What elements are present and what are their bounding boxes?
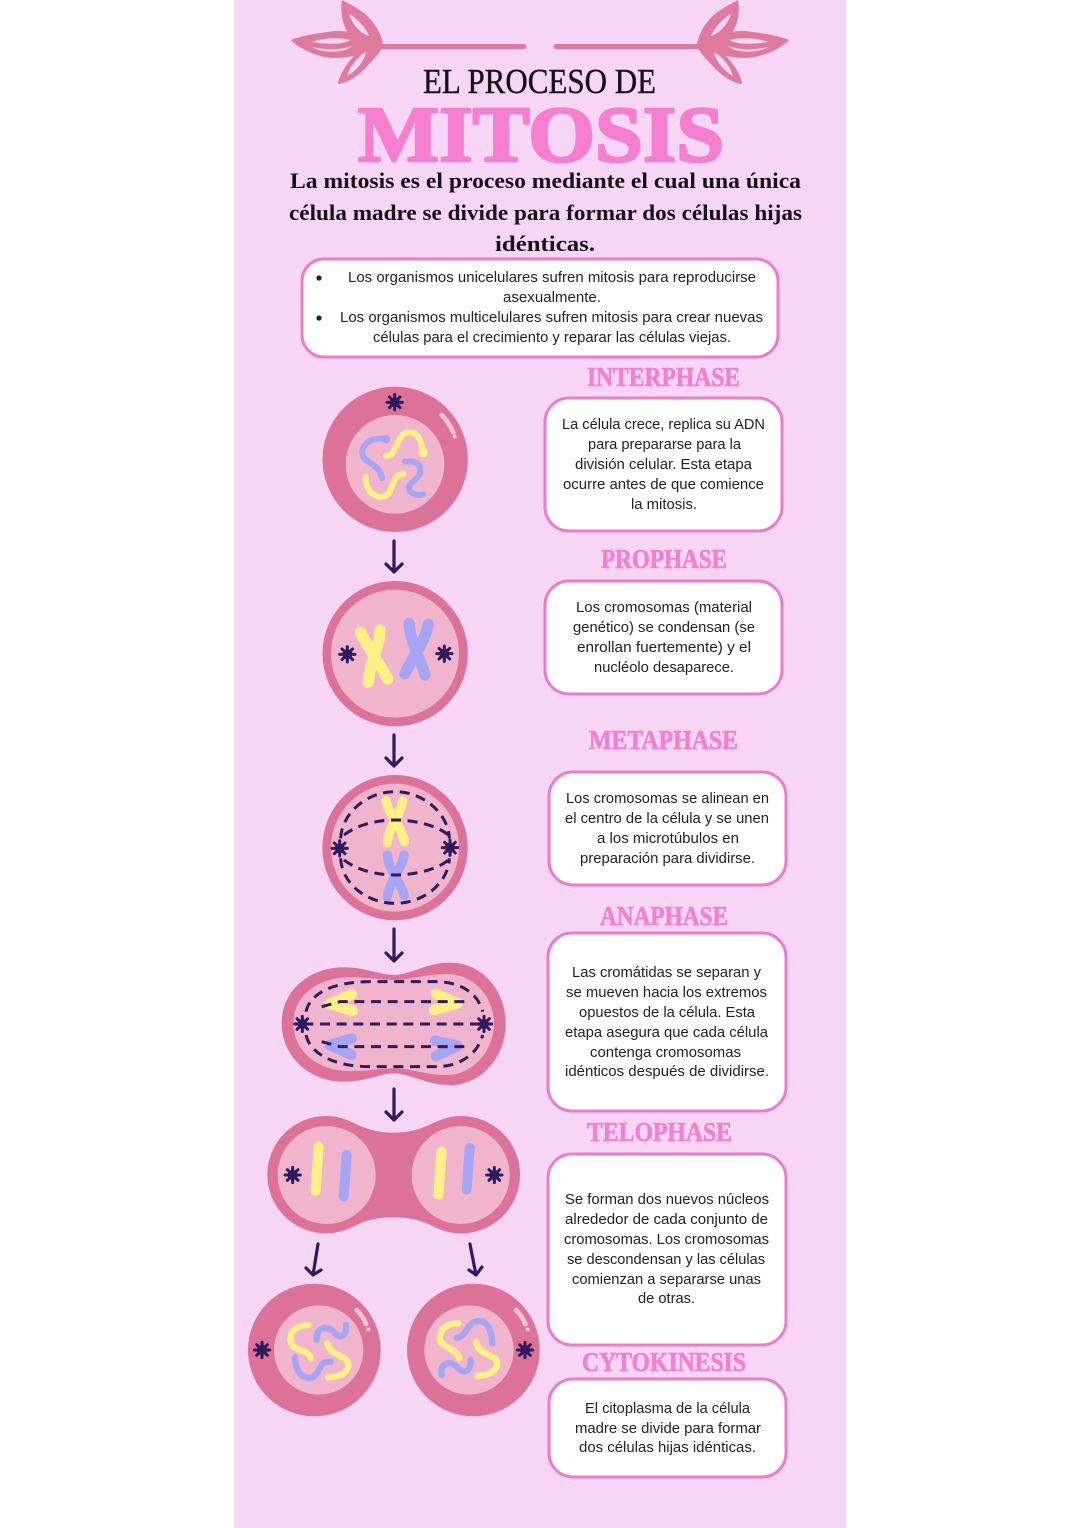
panel: organisms info box: Los organismos unicelulares sufren mitosis para reproducirse — [348, 270, 756, 286]
cell: metaphase — [322, 775, 468, 920]
panel: cytokinesis text — [549, 1379, 786, 1477]
panel: anaphase text: idénticos después de dividirse. — [565, 1064, 769, 1080]
panel: telophase text: alrededor de cada conjunto de — [565, 1212, 768, 1228]
intro paragraph: idénticas. — [495, 231, 595, 256]
heading: cytokinesis: CYTOKINESIS — [582, 1347, 746, 1377]
panel: prophase text: Los cromosomas (material — [576, 600, 752, 616]
arrow: metaphase to anaphase — [386, 929, 402, 961]
panel: cytokinesis text: El citoplasma de la célula — [585, 1401, 751, 1417]
arrow: telophase to right daughter cell — [469, 1244, 482, 1275]
panel: telophase text: de otras. — [638, 1291, 695, 1307]
panel: anaphase text: opuestos de la célula. Esta — [579, 1005, 756, 1021]
title: el proceso de: EL PROCESO DE — [423, 62, 656, 101]
panel: organisms info box — [302, 259, 778, 357]
cell: telophase — [267, 1116, 520, 1233]
panel: interphase text: para prepararse para la — [588, 437, 742, 453]
panel: interphase text — [545, 398, 782, 531]
panel: metaphase text: a los microtúbulos en — [597, 831, 739, 847]
panel: metaphase text: preparación para dividirse. — [580, 851, 755, 867]
panel: anaphase text: contenga cromosomas — [590, 1045, 741, 1061]
heading: prophase: PROPHASE — [601, 544, 727, 574]
panel: prophase text — [545, 581, 782, 694]
panel: cytokinesis text: dos células hijas idénticas. — [579, 1440, 756, 1456]
arrow: prophase to metaphase — [386, 735, 402, 766]
arrow: anaphase to telophase — [386, 1089, 402, 1120]
title: mitosis: MITOSIS — [358, 92, 724, 179]
panel: prophase text: genético) se condensan (se — [573, 620, 755, 636]
arrow: telophase to left daughter cell — [306, 1244, 321, 1275]
heading: anaphase: ANAPHASE — [600, 901, 728, 931]
panel: organisms info box: Los organismos multicelulares sufren mitosis para crear nuevas — [340, 310, 763, 326]
panel: metaphase text: el centro de la célula y se unen — [565, 811, 769, 827]
ornament: right leaf branch — [556, 0, 789, 84]
heading: telophase: TELOPHASE — [587, 1117, 732, 1147]
panel: anaphase text: se mueven hacia los extremos — [566, 985, 767, 1001]
heading: metaphase: METAPHASE — [589, 725, 738, 755]
panel: anaphase text — [548, 933, 786, 1111]
panel: interphase text: la mitosis. — [631, 497, 697, 513]
panel: cytokinesis text: madre se divide para formar — [575, 1421, 761, 1437]
panel: organisms info box: células para el crecimiento y reparar las células viejas. — [373, 330, 731, 346]
intro paragraph: célula madre se divide para formar dos células hijas — [289, 200, 802, 225]
ornament: left leaf branch — [291, 0, 524, 84]
panel: telophase text — [548, 1154, 786, 1345]
panel: prophase text: enrollan fuertemente) y el — [577, 640, 751, 656]
cell: interphase — [322, 387, 468, 532]
intro paragraph — [289, 168, 802, 256]
panel: organisms info box: asexualmente. — [503, 290, 601, 306]
arrow: interphase to prophase — [386, 541, 402, 572]
panel: interphase text: La célula crece, replica su ADN — [562, 417, 765, 433]
cell: prophase — [322, 581, 468, 726]
panel: telophase text: Se forman dos nuevos núcleos — [565, 1192, 769, 1208]
panel: telophase text: comienzan a separarse unas — [572, 1272, 761, 1288]
panel: interphase text: división celular. Esta etapa — [575, 457, 753, 473]
panel: anaphase text: Las cromátidas se separan y — [572, 965, 762, 981]
panel: telophase text: se descondensan y las células — [567, 1252, 765, 1268]
cell: anaphase — [282, 963, 506, 1085]
panel: telophase text: cromosomas. Los cromosomas — [564, 1232, 769, 1248]
cell: right daughter cell — [407, 1284, 540, 1416]
panel: prophase text: nucléolo desaparece. — [594, 660, 734, 676]
panel: metaphase text — [549, 772, 786, 885]
intro paragraph: La mitosis es el proceso mediante el cual una única — [290, 168, 801, 193]
panel: metaphase text: Los cromosomas se alinean en — [566, 791, 769, 807]
cell: left daughter cell — [248, 1284, 381, 1416]
page background panel — [234, 0, 846, 1528]
panel: anaphase text: etapa asegura que cada célula — [565, 1025, 769, 1041]
panel: interphase text: ocurre antes de que comience — [563, 477, 764, 493]
heading: interphase: INTERPHASE — [587, 362, 740, 392]
